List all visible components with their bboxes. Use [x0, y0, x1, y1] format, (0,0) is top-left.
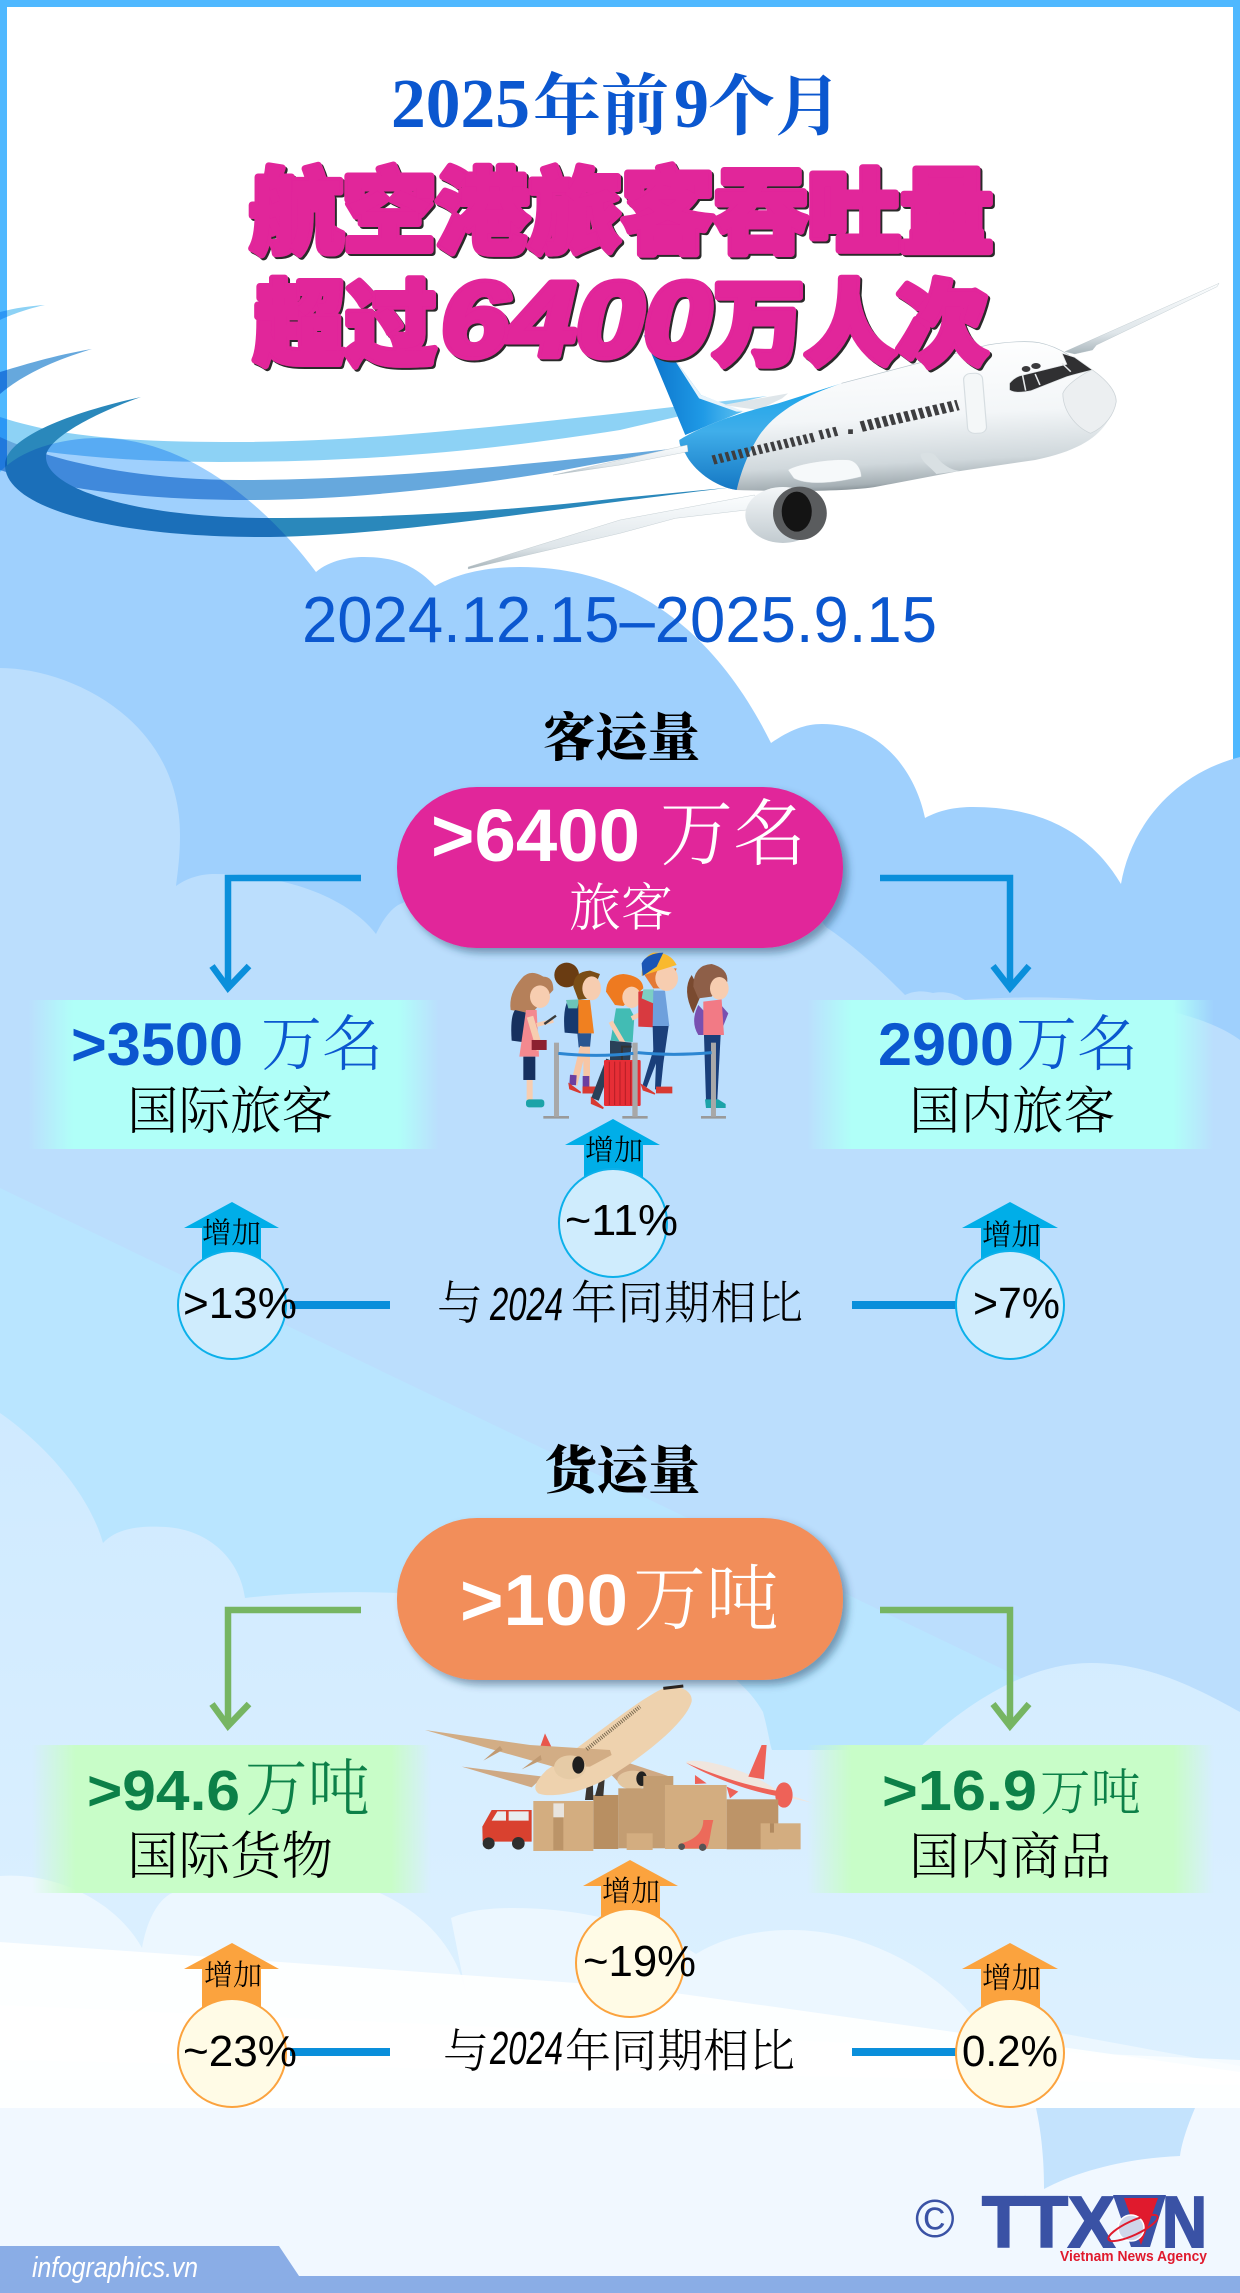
total passengers pill	[397, 775, 843, 948]
section heading: passenger volume: 客运量	[543, 696, 700, 771]
box: domestic passengers	[807, 996, 1214, 1149]
arrows: passenger split	[212, 878, 1029, 988]
total cargo pill: >100	[460, 1561, 628, 1641]
box: international passengers: 国际旅客	[127, 1070, 333, 1144]
box: international cargo: 国际货物	[127, 1815, 333, 1889]
box: domestic goods: 万吨	[1040, 1753, 1141, 1825]
title: main headline: 超过	[254, 251, 436, 384]
illustration: cargo planes, truck and boxes	[425, 1686, 812, 1851]
logo: TTXVN Vietnam News Agency: TTX	[982, 2183, 1115, 2263]
increase: total cargo: 增加	[602, 1869, 660, 1910]
box: international cargo	[32, 1738, 431, 1893]
increase: total passengers: 增加	[585, 1128, 643, 1169]
title: main headline: 万人次	[713, 251, 988, 384]
total passengers pill: >6400	[431, 794, 640, 877]
footer bar	[0, 2246, 1240, 2293]
arrows: cargo split	[212, 1610, 1029, 1726]
increase: domestic goods: 0.2%	[962, 2027, 1058, 2076]
connector lines: cargo comparison	[290, 2048, 957, 2056]
footer bar: infographics.vn	[32, 2252, 198, 2284]
title: date range line: 2025	[391, 66, 530, 143]
comparison note: cargo	[443, 2015, 795, 2081]
increase: domestic passengers: >7%	[973, 1279, 1060, 1328]
increase: total cargo: ~19%	[583, 1937, 696, 1986]
section heading: cargo volume: 货运量	[545, 1429, 700, 1504]
increase: total passengers	[559, 1119, 678, 1277]
box: international cargo: >94.6	[87, 1759, 240, 1823]
total passengers pill: 旅客	[569, 866, 673, 941]
comparison note: passengers: 与	[437, 1267, 483, 1333]
increase: total passengers: ~11%	[565, 1196, 678, 1245]
comparison note: passengers	[437, 1267, 803, 1333]
total passengers pill: 万名	[660, 775, 806, 880]
title: date range line	[391, 53, 842, 149]
increase: international cargo: 增加	[204, 1953, 262, 1994]
increase: domestic goods: 增加	[982, 1955, 1041, 1997]
comparison note: cargo: 年同期相比	[565, 2015, 795, 2081]
copyright mark: ©	[915, 2189, 955, 2249]
title: main headline: 6400	[441, 261, 711, 379]
title: date range line: 年前	[533, 53, 669, 149]
box: domestic goods: 国内商品	[909, 1817, 1111, 1889]
logo: TTXVN Vietnam News Agency: N	[1162, 2183, 1207, 2263]
total cargo pill: 万吨	[633, 1540, 779, 1645]
title: main headline: 航空港旅客吞吐量	[250, 139, 993, 272]
box: international cargo: 万吨	[245, 1738, 370, 1828]
total cargo pill	[397, 1518, 843, 1680]
logo: TTXVN Vietnam News Agency: Vietnam News Agency	[1060, 2248, 1208, 2265]
title: main headline	[250, 139, 993, 384]
box: domestic passengers: 国内旅客	[909, 1070, 1115, 1144]
title: date range line: 9	[674, 66, 709, 143]
increase: domestic goods	[956, 1943, 1064, 2107]
box: international passengers: 万名	[261, 996, 383, 1083]
box: domestic goods: >16.9	[882, 1759, 1037, 1823]
connector lines: passenger comparison	[290, 1301, 957, 1309]
box: domestic passengers: 万名	[1016, 996, 1138, 1083]
comparison note: cargo: 2024	[489, 2022, 563, 2074]
period dates: 2024.12.15–2025.9.15	[302, 583, 937, 656]
increase: domestic passengers: 增加	[982, 1212, 1041, 1254]
logo: TTXVN Vietnam News Agency	[982, 2183, 1208, 2265]
increase: international cargo: ~23%	[183, 2027, 297, 2076]
increase: international passengers: >13%	[183, 1279, 297, 1328]
increase: international passengers: 增加	[202, 1210, 261, 1252]
increase: international passengers	[178, 1202, 297, 1359]
box: domestic goods	[807, 1745, 1214, 1893]
increase: total cargo	[576, 1860, 696, 2017]
comparison note: passengers: 2024	[489, 1278, 563, 1330]
box: international passengers: >3500	[71, 1011, 243, 1078]
increase: domestic passengers	[956, 1202, 1064, 1359]
title: date range line: 个月	[708, 53, 842, 148]
swoosh trails behind the plane	[0, 305, 767, 537]
illustration: passenger airplane	[468, 283, 1219, 569]
comparison note: passengers: 年同期相比	[571, 1267, 803, 1333]
increase: international cargo	[178, 1943, 297, 2107]
comparison note: cargo: 与	[443, 2015, 489, 2081]
box: international passengers	[28, 996, 439, 1149]
box: domestic passengers: 2900	[878, 1011, 1014, 1078]
illustration: passengers in queue	[510, 953, 729, 1119]
